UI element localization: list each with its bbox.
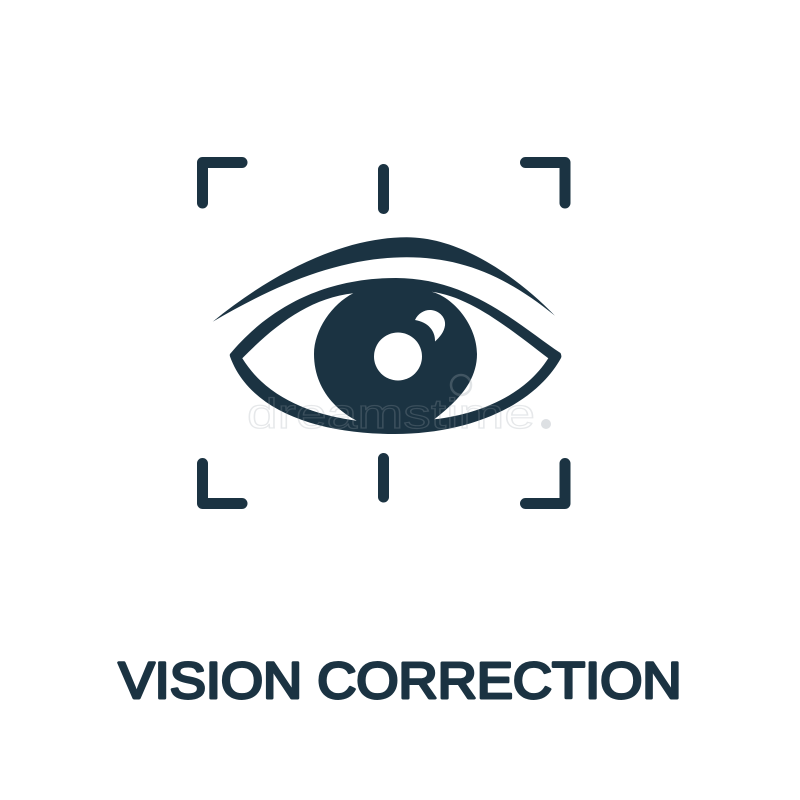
watermark: dreamstime (247, 390, 535, 437)
eye outline and iris (230, 278, 561, 434)
focus frame brackets and ticks (202, 162, 565, 504)
icon: vision correction eye in focus frame (202, 162, 565, 504)
iris highlight (415, 310, 445, 342)
watermark (247, 375, 551, 437)
pupil (374, 332, 422, 380)
eyebrow (213, 237, 555, 322)
title: VISION CORRECTION (118, 652, 682, 709)
